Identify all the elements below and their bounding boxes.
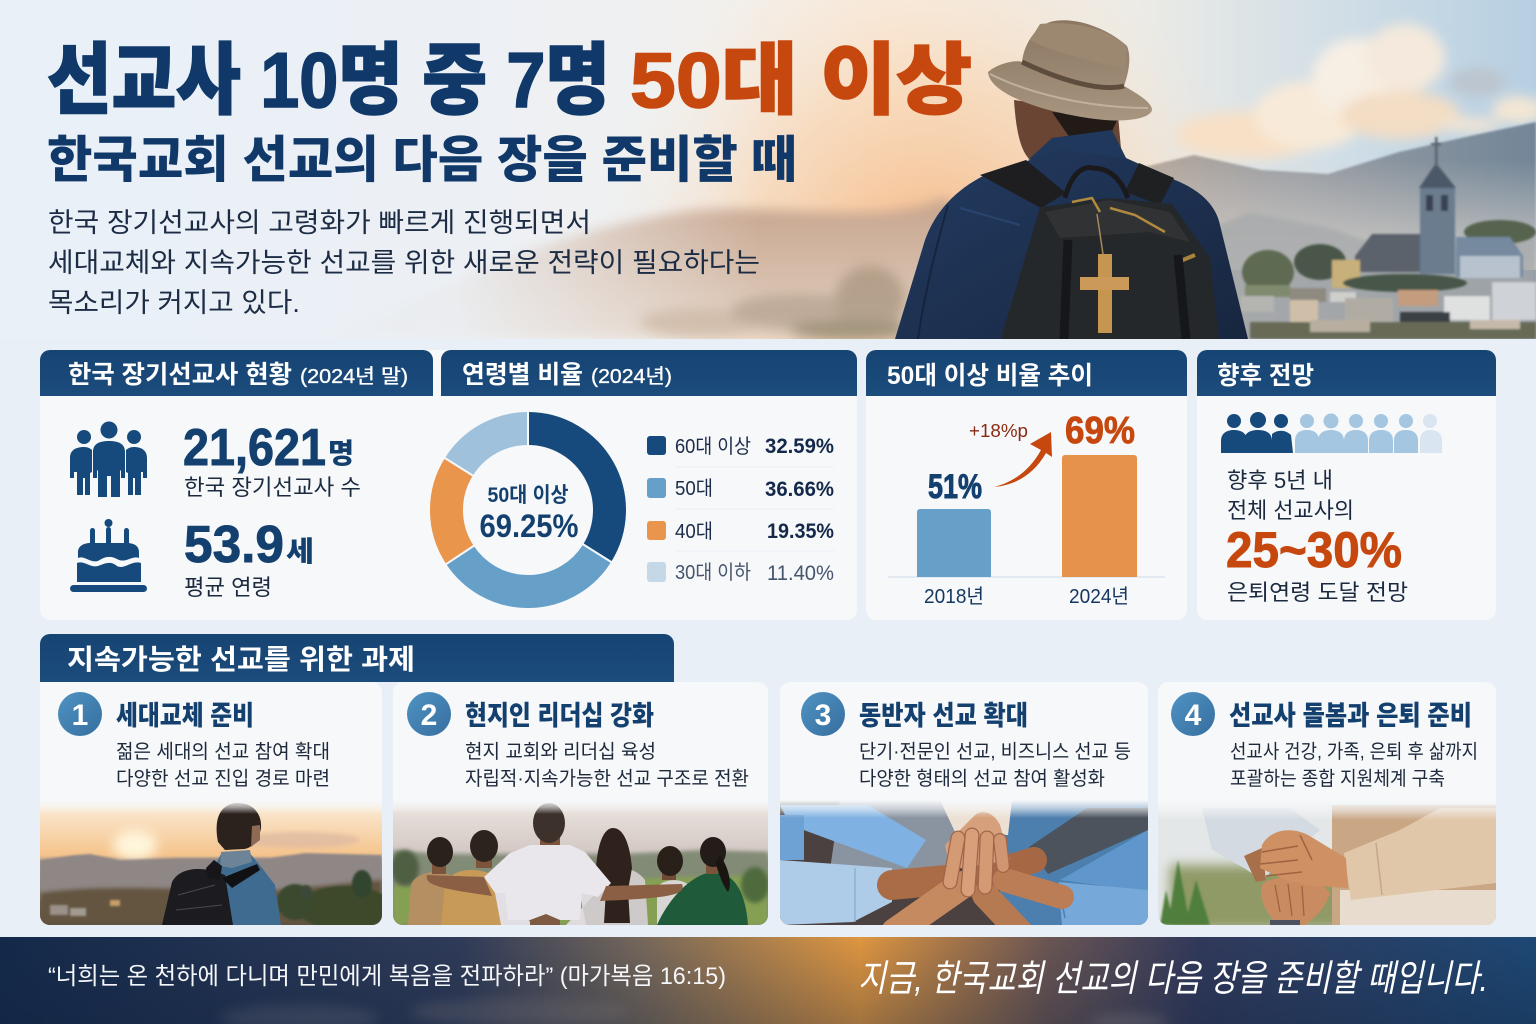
outlook text [1226,468,1408,605]
intro paragraph: 세대교체와 지속가능한 선교를 위한 새로운 전략이 필요하다는 [48,248,760,278]
card 3 text [859,701,1131,790]
icon: people [70,422,147,497]
legend [647,435,834,585]
man [895,20,1248,339]
bar chart [888,410,1165,608]
card 1 text [116,701,330,790]
badge 1 [58,692,102,736]
section heading: sustainable mission tasks [40,634,674,682]
card 3 text: 단기·전문인 선교, 비즈니스 선교 등 [859,741,1131,763]
donut centre label [480,484,578,544]
card 2 photo [391,800,769,925]
panel: current status [40,350,857,620]
card 4 photo [1158,800,1496,930]
arrow [994,432,1052,487]
card 1 text: 젊은 세대의 선교 참여 확대 [116,741,330,763]
bar chart: 2024년 [1069,585,1129,608]
card 4 text: 선교사 건강, 가족, 은퇴 후 삶까지 [1230,741,1478,763]
card 2: local leadership [391,682,769,925]
person 3 [495,893,532,925]
bar chart: 51% [928,468,982,506]
person 1 [408,872,452,925]
legend: 32.59% [765,435,834,458]
outlook text: 향후 5년 내 [1227,468,1333,493]
card 2 text [465,701,749,790]
card 2 text: 현지 교회와 리더십 육성 [465,741,656,763]
heading: age ratio: 연령별 비율 [462,361,583,389]
title: 50대 이상 [630,36,972,124]
card 3 text: 동반자 선교 확대 [859,701,1028,731]
card 3: partner mission [780,682,1148,932]
hands [892,860,1062,932]
card 2 text: 자립적·지속가능한 선교 구조로 전환 [465,768,749,790]
outlook text: 전체 선교사의 [1227,498,1354,523]
legend: 30대 이하 [675,561,751,584]
person 6 [657,872,748,925]
person 5 [657,880,688,925]
heading: trend: 50대 이상 비율 추이 [887,362,1093,390]
bar chart: 69% [1065,410,1135,452]
badge 2 [407,692,451,736]
outlook text: 25~30% [1226,522,1402,578]
footer band [0,937,1536,1024]
hat [988,20,1152,121]
backpack [1001,198,1219,339]
card 3 text: 다양한 형태의 선교 참여 활성화 [859,768,1105,790]
stat: missionaries: 21,621 [183,419,326,477]
title: 선교사 10명 중 7명 [47,36,610,124]
legend: 11.40% [767,562,834,585]
donut centre label: 50대 이상 [488,484,568,507]
heading: outlook: 향후 전망 [1217,362,1314,390]
hero photo: missionary looking over a town and church [439,0,1536,339]
badge 4: 4 [1185,699,1202,732]
card 1 photo [40,800,393,930]
badge 1: 1 [72,699,88,732]
legend: 40대 [675,520,713,543]
stat: average age [184,516,314,600]
donut centre label: 69.25% [480,508,578,544]
straps [980,160,1066,208]
section heading: sustainable mission tasks: 지속가능한 선교를 위한 과제 [67,644,415,675]
panel: trend [866,350,1187,620]
subtitle: 한국교회 선교의 다음 장을 준비할 때 [47,132,797,188]
donut chart [444,410,612,592]
hazy town, left [640,266,910,340]
badge 3 [801,692,845,736]
stat: missionaries [183,419,361,500]
person 2 [441,870,501,925]
man [217,852,281,925]
card 2 text: 현지인 리더십 강화 [465,701,654,731]
town and church, right [1240,137,1536,339]
icon row: retiring share [1221,412,1442,453]
outlook text: 은퇴연령 도달 전망 [1227,580,1408,605]
person 4 [580,867,648,925]
stat: missionaries: 한국 장기선교사 수 [184,475,361,500]
photo fade [780,800,1148,818]
card 4 text [1229,701,1478,790]
panel: age ratio: (2024년) [591,365,672,388]
title [47,36,972,124]
legend: 60대 이상 [675,435,751,458]
intro paragraph: 목소리가 커지고 있다. [48,288,300,318]
photo fade [40,800,382,814]
panel: current status: (2024년 말) [300,365,408,388]
legend: 19.35% [767,520,834,543]
photo fade [1158,800,1496,820]
intro paragraph [48,208,760,318]
bar chart: 2018년 [924,585,984,608]
legend: 50대 [675,477,713,500]
legend: 36.66% [765,478,834,501]
card 1 text: 다양한 선교 진입 경로 마련 [116,768,330,790]
card 4 text: 포괄하는 종합 지원체계 구축 [1230,768,1445,790]
card 4: missionary care [1158,682,1496,930]
panel: age ratio [441,350,857,592]
left fade [334,207,729,339]
card 4 text: 선교사 돌봄과 은퇴 준비 [1229,701,1472,731]
stat: average age: 53.9 [184,516,284,574]
intro paragraph: 한국 장기선교사의 고령화가 빠르게 진행되면서 [48,208,591,238]
stat: average age: 세 [286,536,314,567]
clouds [1175,24,1536,159]
card 1 text: 세대교체 준비 [116,701,254,731]
mountains [464,194,952,339]
badge 3: 3 [815,699,831,732]
scripture quote: “너희는 온 천하에 다니며 만민에게 복음을 전파하라” (마가복음 16:15) [48,963,726,990]
stat: average age: 평균 연령 [184,575,272,600]
badge 2: 2 [421,699,437,732]
icon: cake [70,519,147,592]
photo fade [393,800,768,814]
panel: outlook [1197,350,1496,620]
stat: missionaries: 명 [328,438,354,469]
card 1: generation change [40,682,393,930]
badge 4 [1171,692,1215,736]
growth label: +18%p [969,421,1028,441]
card 3 photo [780,800,1148,932]
heading: current status: 한국 장기선교사 현황 [68,361,292,389]
